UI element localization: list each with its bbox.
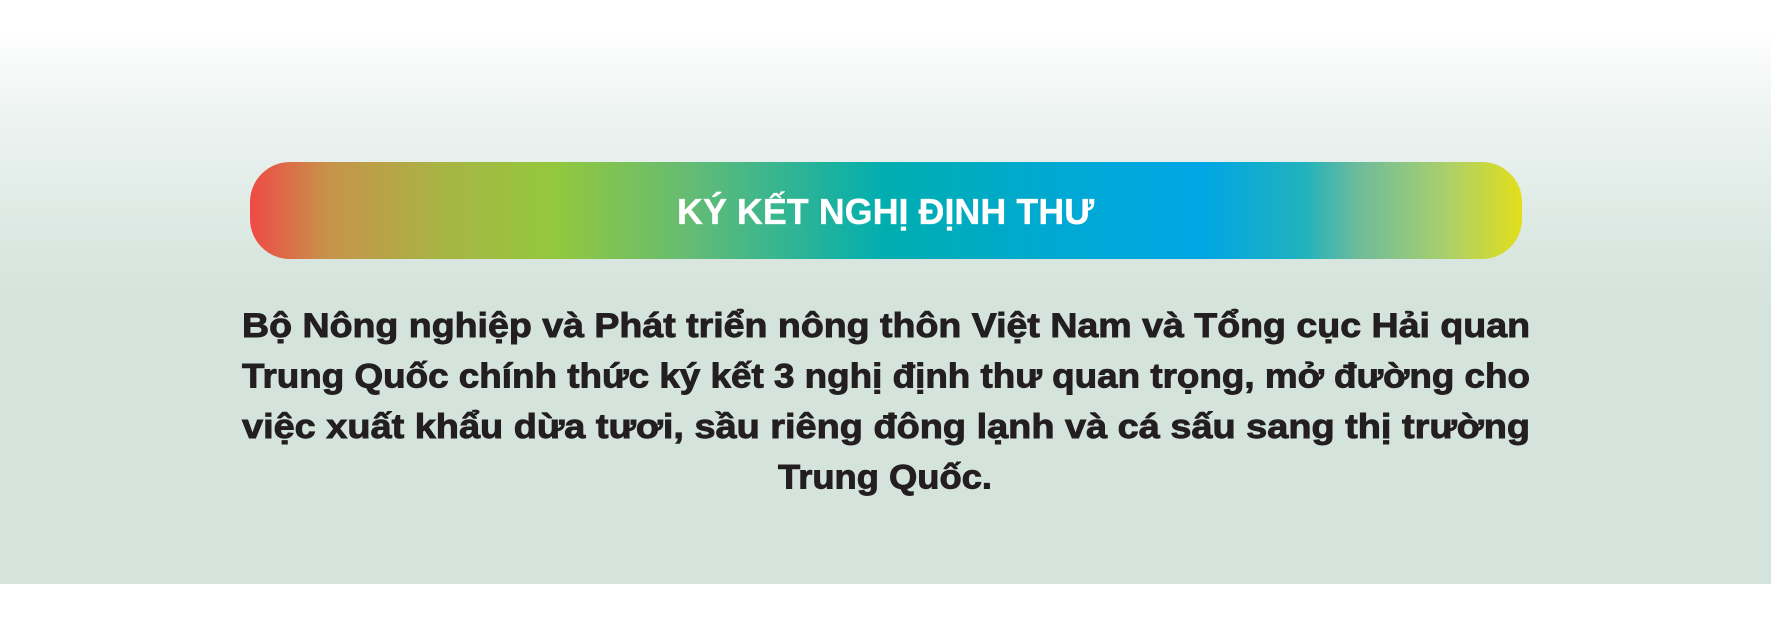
heading banner xyxy=(250,162,1522,259)
body paragraph xyxy=(242,307,1530,496)
heading: KÝ KẾT NGHỊ ĐỊNH THƯ xyxy=(677,191,1094,232)
body paragraph: Trung Quốc chính thức ký kết 3 nghị định thư quan trọng, mở đường cho xyxy=(242,358,1530,396)
body paragraph: Trung Quốc. xyxy=(778,458,992,496)
body paragraph: việc xuất khẩu dừa tươi, sầu riêng đông lạnh và cá sấu sang thị trường xyxy=(242,408,1530,446)
body paragraph: Bộ Nông nghiệp và Phát triển nông thôn Việt Nam và Tổng cục Hải quan xyxy=(242,307,1530,345)
